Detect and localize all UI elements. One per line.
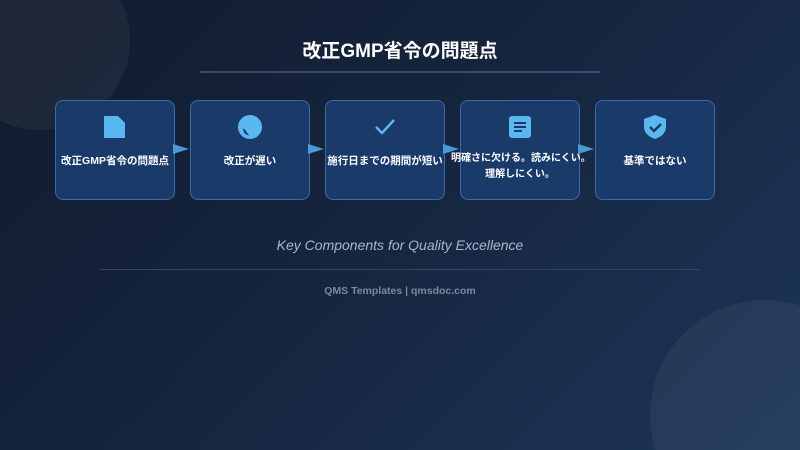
icon: document <box>509 116 531 138</box>
icon: shield <box>644 115 666 139</box>
box 2: 改正が遅い <box>224 155 276 167</box>
icon: circle <box>238 115 262 139</box>
icon: file <box>104 116 125 138</box>
box 5 <box>595 100 715 200</box>
arrow 3 <box>443 144 459 154</box>
footer: QMS Templates | qmsdoc.com <box>324 285 476 297</box>
subtitle: Key Components for Quality Excellence <box>277 237 523 253</box>
title: 改正GMP省令の問題点 <box>302 41 498 62</box>
box 3 <box>325 100 445 200</box>
arrow 1 <box>173 144 189 154</box>
arrow 4 <box>578 144 594 154</box>
icon: check <box>375 119 395 135</box>
box 3: 施行日までの期間が短い <box>327 155 443 167</box>
arrow 2 <box>308 144 324 154</box>
box 1 <box>55 100 175 200</box>
box 5: 基準ではない <box>624 155 686 167</box>
box 4: 理解しにくい。 <box>485 169 555 180</box>
box 4: 明確さに欠ける。読みにくい。 <box>451 153 591 164</box>
box 4 <box>460 100 580 200</box>
box 2 <box>190 100 310 200</box>
box 1: 改正GMP省令の問題点 <box>61 155 169 167</box>
